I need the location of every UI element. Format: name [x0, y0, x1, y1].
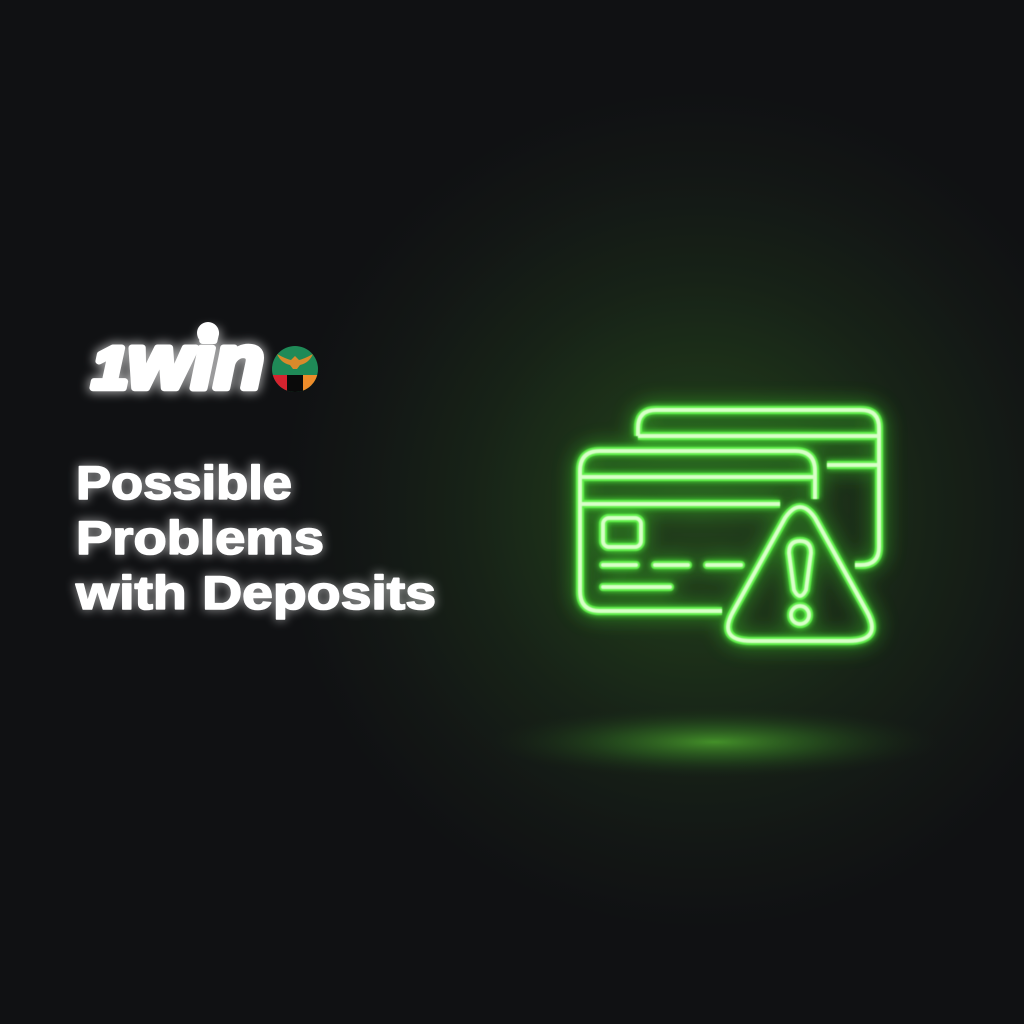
logo wordmark: win	[128, 320, 264, 405]
title text: with Deposits	[75, 566, 436, 619]
title text: Possible	[76, 456, 292, 509]
wide glow	[580, 410, 879, 641]
title text: Problems	[76, 511, 324, 564]
title glow: with Deposits	[75, 566, 436, 619]
logo i dot	[197, 322, 219, 344]
floor glow	[490, 706, 940, 778]
logo wordmark glow: 1	[92, 336, 128, 401]
logo: 1win with Zambia flag	[92, 320, 318, 405]
logo wordmark glow: win	[128, 320, 264, 405]
near glow	[580, 410, 879, 641]
title glow	[75, 456, 436, 619]
logo wordmark: 1	[92, 336, 128, 401]
icon: Zambia flag	[272, 346, 318, 393]
title text	[75, 456, 436, 619]
green tube	[580, 410, 879, 641]
icon: neon credit cards with warning triangle	[580, 410, 879, 641]
bright core	[580, 410, 879, 641]
title glow: Possible	[76, 456, 292, 509]
title glow: Problems	[76, 511, 324, 564]
title	[75, 456, 436, 619]
